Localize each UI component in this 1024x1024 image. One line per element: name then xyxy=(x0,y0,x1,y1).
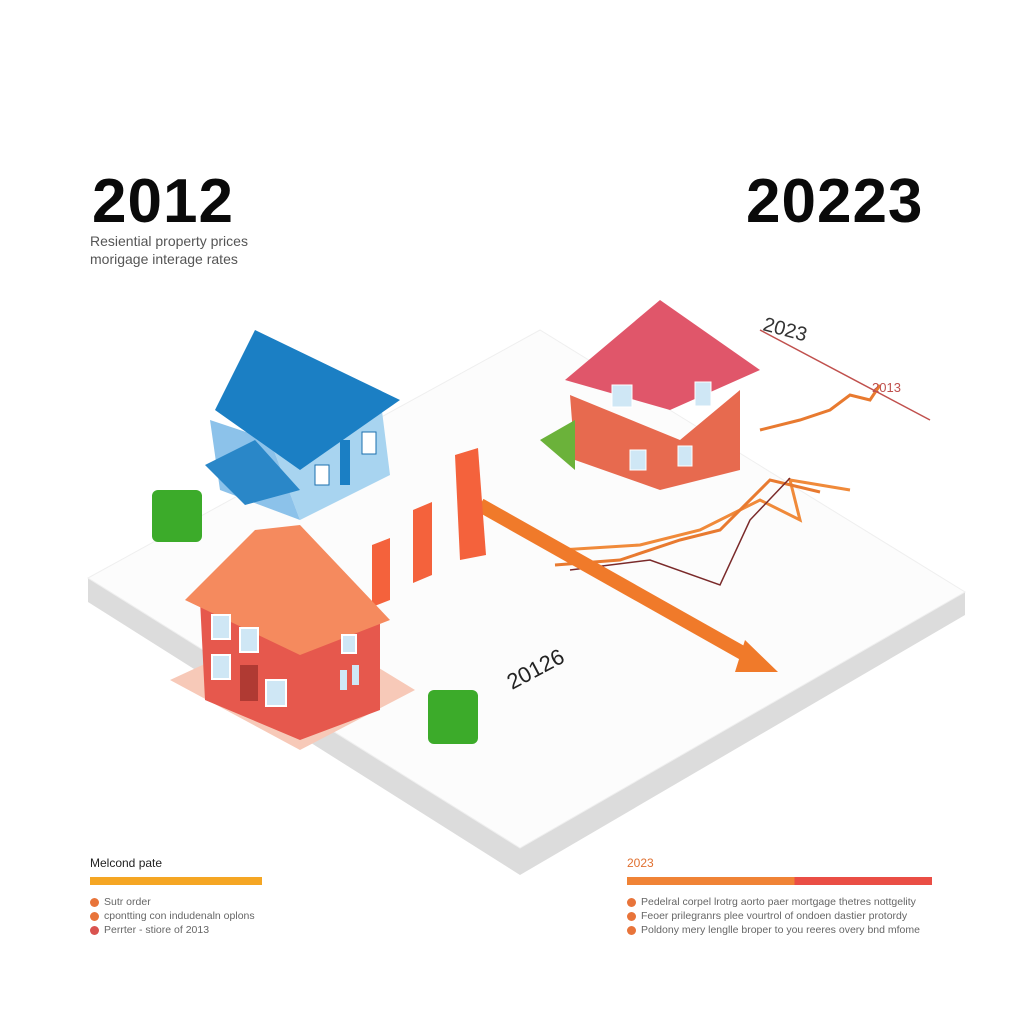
subtitle left: Resiential property prices xyxy=(90,233,248,249)
heading: Melcond pate xyxy=(90,856,162,870)
list: Pedelral corpel lrotrg aorto paer mortgage thetres nottgelity xyxy=(641,896,916,908)
bushes xyxy=(152,490,478,744)
platform xyxy=(88,330,965,875)
title: 20223: 20223 xyxy=(746,167,923,236)
big arrow xyxy=(480,505,778,672)
chart lines xyxy=(555,330,930,585)
subtitle left xyxy=(90,233,248,267)
bars xyxy=(372,448,486,607)
list: Perrter - stiore of 2013 xyxy=(104,924,209,936)
list: Sutr order xyxy=(104,896,151,908)
label 2013: 2013 xyxy=(872,380,901,395)
orange house front xyxy=(185,525,390,740)
bar xyxy=(627,877,932,885)
bar xyxy=(90,877,262,885)
subtitle left: morigage interage rates xyxy=(90,251,238,267)
label 2023 chart: 2023 xyxy=(761,314,809,346)
title: 2012: 2012 xyxy=(92,167,234,236)
list: Poldony mery lenglle broper to you reeres overy bnd mfome xyxy=(641,924,920,936)
year label 20126: 20126 xyxy=(503,644,568,694)
red house back xyxy=(540,300,760,490)
list: Feoer prilegranrs plee vourtrol of ondoen dastier protordy xyxy=(641,910,907,922)
bottom left panel xyxy=(90,856,262,936)
list xyxy=(90,896,255,936)
list xyxy=(627,896,920,936)
list: cpontting con indudenaln oplons xyxy=(104,910,255,922)
heading: 2023 xyxy=(627,856,654,870)
blue house xyxy=(205,330,400,520)
bottom right panel xyxy=(627,856,932,936)
